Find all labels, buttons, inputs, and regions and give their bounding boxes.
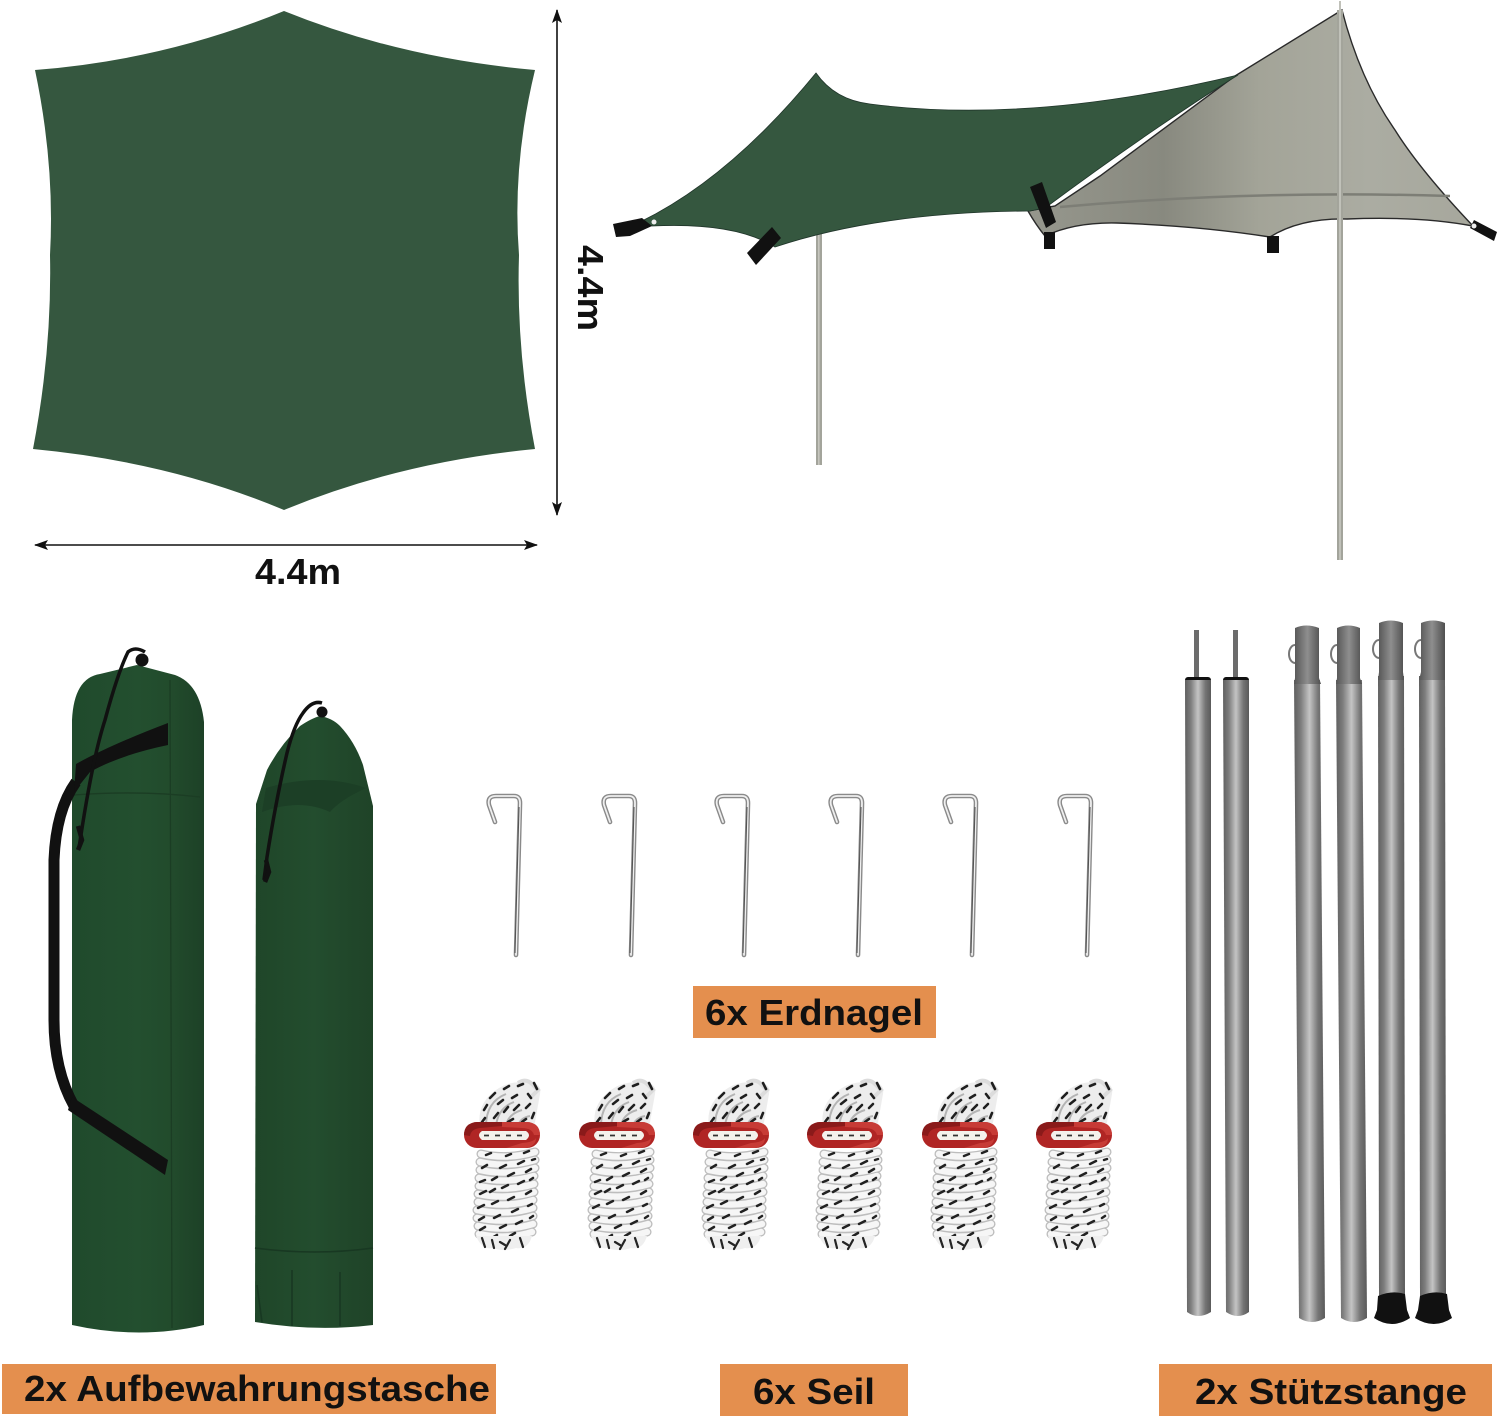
flat green tarp (top view)	[33, 11, 535, 510]
pole 5 with rubber foot	[1378, 676, 1405, 1296]
shoulder strap	[54, 782, 76, 1106]
pole 1	[1194, 630, 1199, 678]
bottom hem	[255, 1248, 373, 1326]
pole 2	[1233, 630, 1238, 678]
label: ropes	[720, 1364, 908, 1416]
label: ropes: 6x Seil	[753, 1371, 875, 1412]
pole 3	[1294, 680, 1325, 1322]
label: support poles	[1159, 1364, 1492, 1416]
pitched tarp with poles	[613, 1, 1497, 560]
ground stakes	[489, 796, 1091, 955]
width dimension arrow	[35, 544, 537, 546]
green top of tarp	[640, 73, 1238, 247]
height label: 4.4m	[570, 245, 611, 331]
pole 4	[1336, 680, 1367, 1322]
label: ground stakes	[693, 986, 936, 1038]
guy ropes with red tensioners	[464, 1081, 1112, 1250]
grey underside of tarp	[1028, 10, 1473, 237]
tarp hem seam	[1060, 194, 1450, 207]
fold shadow	[262, 780, 366, 812]
pole 6 with rubber foot	[1419, 676, 1446, 1296]
storage bag with shoulder strap	[54, 649, 204, 1332]
height dimension arrow	[556, 10, 558, 515]
corner straps	[613, 182, 1497, 265]
width label: 4.4m	[255, 551, 341, 592]
label: storage bags: 2x Aufbewahrungstasche	[24, 1368, 490, 1409]
bag body	[255, 716, 373, 1328]
drawcord and toggle	[79, 649, 145, 848]
support poles	[1185, 620, 1452, 1324]
right support pole	[1337, 10, 1343, 560]
drawcord and toggle	[264, 702, 322, 880]
bag body	[72, 665, 204, 1332]
label: ground stakes: 6x Erdnagel	[705, 992, 923, 1033]
storage bag with drawstring	[255, 702, 373, 1328]
eyelets	[652, 220, 1476, 228]
left support pole	[816, 230, 822, 465]
label: support poles: 2x Stützstange	[1195, 1371, 1467, 1412]
bag seam	[74, 680, 200, 1328]
